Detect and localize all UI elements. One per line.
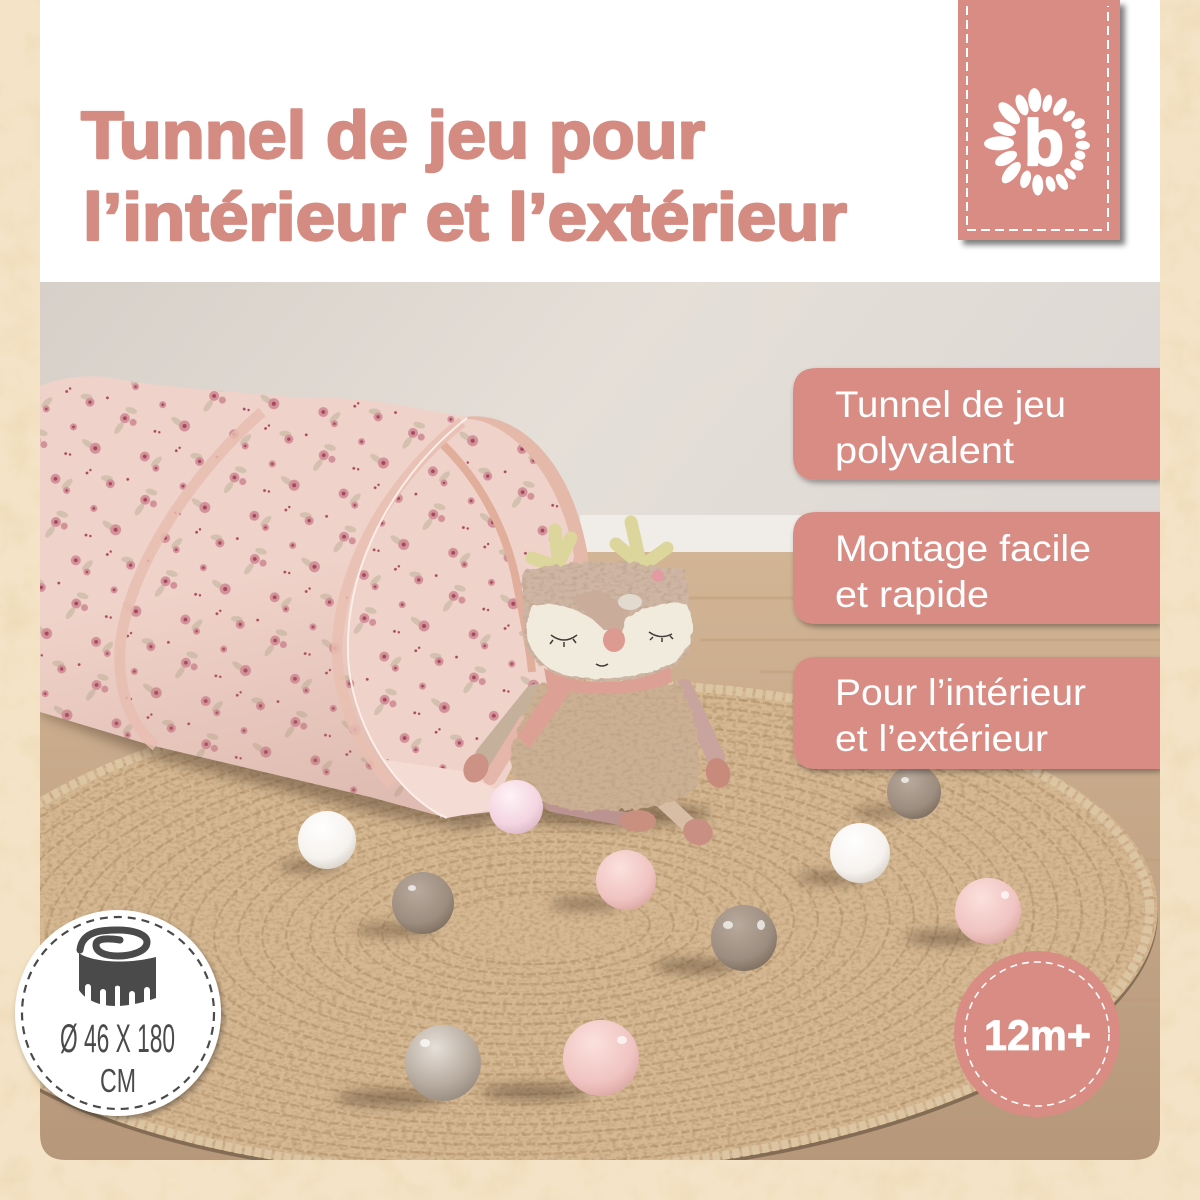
callout: pour l'intérieur et l'extérieur: et l’extérieur xyxy=(835,718,1048,759)
forehead patches xyxy=(618,594,642,610)
callout: tunnel de jeu polyvalent: Tunnel de jeu xyxy=(835,384,1066,425)
title: l’intérieur et l’extérieur xyxy=(83,180,847,255)
ball pit balls xyxy=(298,765,1021,1101)
callout: montage facile et rapide: et rapide xyxy=(835,574,989,615)
dimensions text: CM xyxy=(100,1062,136,1099)
title: Tunnel de jeu pour xyxy=(81,98,705,173)
title xyxy=(81,98,847,255)
tunnel shadow on rug xyxy=(40,700,520,830)
icon: rolled measuring tape xyxy=(79,930,156,1008)
bow xyxy=(652,570,664,582)
baseboard xyxy=(580,515,802,552)
eyes and mouth xyxy=(550,632,673,666)
tunnel body xyxy=(40,376,468,818)
legs xyxy=(552,800,717,849)
wood floor xyxy=(40,552,1160,1162)
nose xyxy=(603,628,625,652)
callout: montage facile et rapide xyxy=(793,512,1160,624)
forehead tuft xyxy=(570,590,630,632)
callout: pour l'intérieur et l'extérieur: Pour l’intérieur xyxy=(835,672,1086,713)
icon: brand flower logo xyxy=(984,88,1090,196)
dimensions text xyxy=(60,1017,175,1099)
badge: age 12m+: 12m+ xyxy=(984,1012,1091,1060)
rim edge xyxy=(348,418,467,818)
callout: tunnel de jeu polyvalent: polyvalent xyxy=(835,430,1015,471)
rim band on body xyxy=(337,422,462,785)
scarf xyxy=(517,666,672,748)
wall xyxy=(40,282,1160,521)
brand tag with logo xyxy=(958,0,1120,240)
hoop band xyxy=(120,412,262,746)
round jute rug xyxy=(40,678,1158,1160)
right arm xyxy=(684,688,733,791)
left arm xyxy=(459,695,535,787)
badge: dimensions xyxy=(15,910,221,1116)
interior floor xyxy=(385,760,495,818)
callout: tunnel de jeu polyvalent xyxy=(793,368,1160,480)
outer rim band xyxy=(440,416,588,818)
icon: brand flower logo: b xyxy=(1024,106,1064,179)
callout: pour l'intérieur et l'extérieur xyxy=(793,657,1160,769)
body shading xyxy=(40,645,441,816)
plush owl toy xyxy=(459,522,733,849)
callout: montage facile et rapide: Montage facile xyxy=(835,528,1091,569)
face xyxy=(526,603,693,679)
interior hoop xyxy=(436,438,532,672)
badge: age 12m+ xyxy=(954,951,1120,1117)
antlers xyxy=(532,522,667,568)
white header panel xyxy=(40,0,1160,282)
body xyxy=(511,682,699,810)
head fur xyxy=(522,562,692,682)
ball shadows xyxy=(278,802,985,1106)
tunnel interior xyxy=(348,419,574,817)
dimensions text: Ø 46 X 180 xyxy=(60,1017,175,1061)
product photo xyxy=(0,282,1166,1200)
floral play tunnel xyxy=(40,376,588,818)
